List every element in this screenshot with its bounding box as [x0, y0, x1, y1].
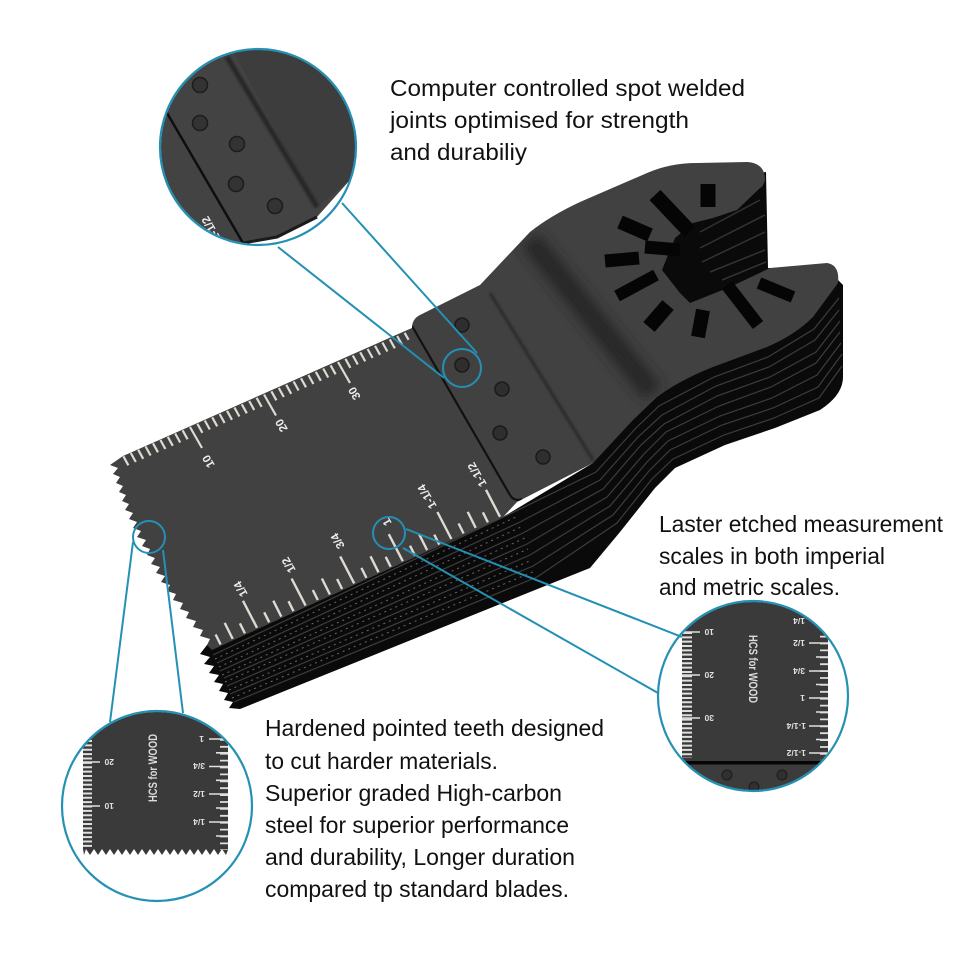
magnified circle: pointed teeth: 1/2 [193, 789, 205, 799]
magnified circle: pointed teeth: 20 [104, 757, 114, 767]
text block: spot welded joints: Computer controlled spot welded [390, 75, 745, 101]
ruler labels: 1-1/4 [416, 481, 440, 510]
magnified circle: pointed teeth: 3/4 [193, 761, 205, 771]
text block: hardened teeth: Superior graded High-carbon [265, 780, 562, 806]
text block: spot welded joints: and durabiliy [390, 139, 528, 165]
magnified circle: pointed teeth: 1 [199, 734, 204, 744]
magnified circle: measurement scales: 1/4 [793, 616, 805, 626]
magnified circle: measurement scales: 30 [704, 713, 714, 723]
magnified circle: pointed teeth: 10 [104, 801, 114, 811]
magnified circle: measurement scales: 1-1/2 [786, 748, 806, 758]
text block: measurement scales: Laster etched measurement [659, 511, 944, 537]
text block: measurement scales [659, 511, 944, 600]
magnified circle: pointed teeth: HCS for WOOD [146, 734, 160, 802]
text block: hardened teeth: steel for superior performance [265, 812, 569, 838]
ruler labels: 30 [347, 384, 364, 402]
text block: hardened teeth: compared tp standard blades. [265, 876, 569, 902]
ruler labels: 20 [274, 416, 291, 434]
arbor slots [605, 184, 793, 337]
magnified circle: measurement scales: 20 [704, 670, 714, 680]
magnified circle: measurement scales [656, 600, 850, 792]
ruler labels [201, 384, 490, 598]
magnified circle: measurement scales: 1 [800, 693, 805, 703]
text block: hardened teeth: to cut harder materials. [265, 748, 498, 774]
blade stack product photo [110, 162, 843, 709]
text block: measurement scales: and metric scales. [659, 574, 840, 600]
ruler labels: 1 [381, 515, 395, 528]
magnified circle: measurement scales: 3/4 [793, 666, 805, 676]
magnified circle: pointed teeth: 1/4 [193, 817, 205, 827]
ruler labels: 1/4 [232, 578, 251, 598]
magnified circle: measurement scales: 1-1/4 [786, 721, 806, 731]
text block: hardened teeth: and durability, Longer duration [265, 844, 575, 870]
text block: spot welded joints: joints optimised for strength [389, 107, 689, 133]
ruler labels: 10 [201, 452, 218, 470]
callout connectors and small target circles [110, 203, 682, 722]
imperial ruler ticks [216, 490, 500, 644]
text block: hardened teeth [265, 715, 604, 902]
text block: spot welded joints [389, 75, 745, 165]
metric ruler ticks [123, 333, 409, 465]
ruler labels: 1/2 [280, 555, 299, 574]
magnified circle: measurement scales: 10 [704, 627, 714, 637]
ruler labels: 1-1/2 [466, 460, 490, 488]
text block: hardened teeth: Hardened pointed teeth designed [265, 715, 604, 741]
magnified circle: measurement scales: 1/2 [793, 638, 805, 648]
magnified circle: pointed teeth [62, 700, 252, 901]
text block: measurement scales: scales in both imperial [659, 543, 885, 569]
magnified circle: spot welds: 1-1/2 [200, 214, 224, 242]
magnified circle: measurement scales: HCS for WOOD [746, 635, 760, 703]
ruler labels: 3/4 [329, 530, 348, 550]
stacked blade layers [200, 172, 843, 709]
weld holes [455, 318, 550, 464]
top blade face [110, 162, 838, 650]
magnified circle: spot welds [158, 48, 358, 246]
